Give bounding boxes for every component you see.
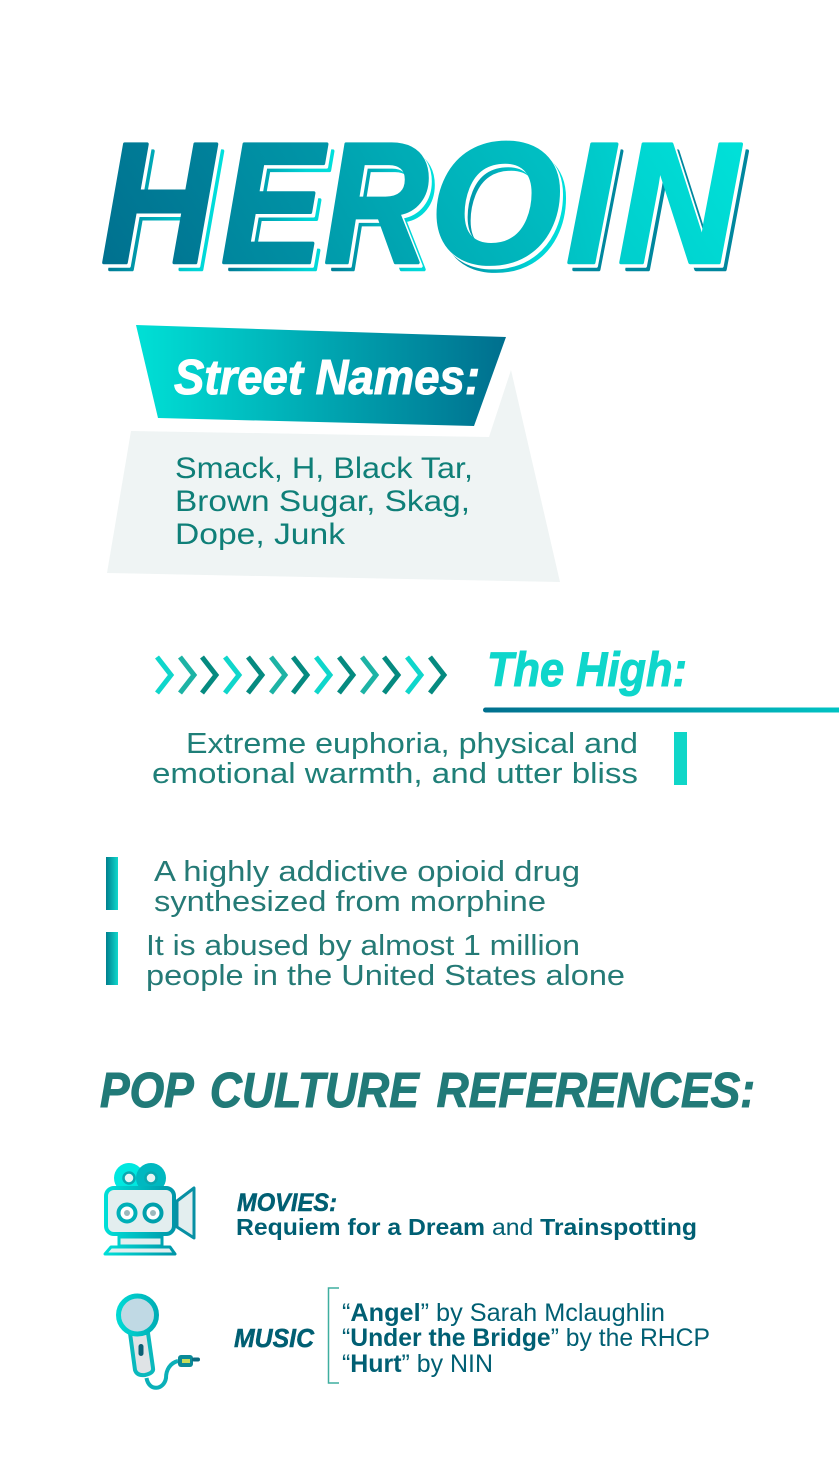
the high heading: The High: — [487, 644, 687, 697]
street names heading: Street Names: — [174, 351, 480, 405]
title: N — [618, 107, 742, 299]
title: R — [324, 107, 428, 299]
title: N — [624, 114, 748, 306]
text: the high description — [152, 728, 638, 790]
title: R — [327, 110, 431, 303]
street names list: Smack, H, Black Tar, — [175, 452, 473, 485]
movies list: Requiem for a Dream and Trainspotting — [236, 1214, 697, 1240]
fact: users: It is abused by almost 1 million — [146, 930, 580, 962]
pop culture heading: POP CULTURE REFERENCES: — [100, 1064, 755, 1118]
chevron arrows — [157, 657, 444, 693]
title: H — [104, 110, 220, 303]
street names list: Brown Sugar, Skag, — [175, 485, 470, 518]
street names list — [175, 452, 473, 551]
speech bubble background — [107, 370, 560, 582]
fact: opioid drug: synthesized from morphine — [154, 886, 546, 918]
title: E — [224, 111, 330, 303]
panel: street names — [107, 325, 560, 582]
text: the high description: Extreme euphoria, physical and — [186, 728, 638, 760]
fact: users — [106, 930, 625, 992]
fact: opioid drug — [106, 856, 580, 918]
title: O — [433, 111, 564, 303]
title: H — [101, 107, 217, 299]
movies label: MOVIES: — [237, 1189, 337, 1217]
music list: “Under the Bridge” by the RHCP — [342, 1324, 710, 1352]
accent bar — [674, 732, 687, 785]
music label: MUSIC — [234, 1323, 315, 1353]
text: the high description: emotional warmth, and utter bliss — [152, 758, 638, 790]
title: I — [568, 111, 620, 303]
title: H — [107, 114, 223, 306]
title — [101, 107, 748, 307]
title: I — [566, 108, 617, 300]
street names list: Dope, Junk — [175, 518, 346, 551]
music list: “Hurt” by NIN — [342, 1350, 493, 1378]
title: E — [221, 107, 327, 299]
title: O — [430, 108, 561, 300]
music list: “Angel” by Sarah Mclaughlin — [342, 1299, 665, 1327]
fact: opioid drug: A highly addictive opioid drug — [154, 856, 580, 888]
title: R — [330, 114, 434, 306]
fact: users: people in the United States alone — [146, 960, 625, 992]
heading underline — [483, 708, 839, 712]
title: I — [571, 114, 622, 306]
icon: movie camera — [105, 1163, 194, 1254]
street names banner — [136, 325, 506, 426]
music list — [342, 1299, 710, 1378]
title: E — [227, 114, 333, 306]
bracket — [328, 1288, 339, 1383]
title: O — [436, 115, 567, 307]
title: N — [621, 111, 745, 303]
icon: microphone — [118, 1296, 200, 1388]
